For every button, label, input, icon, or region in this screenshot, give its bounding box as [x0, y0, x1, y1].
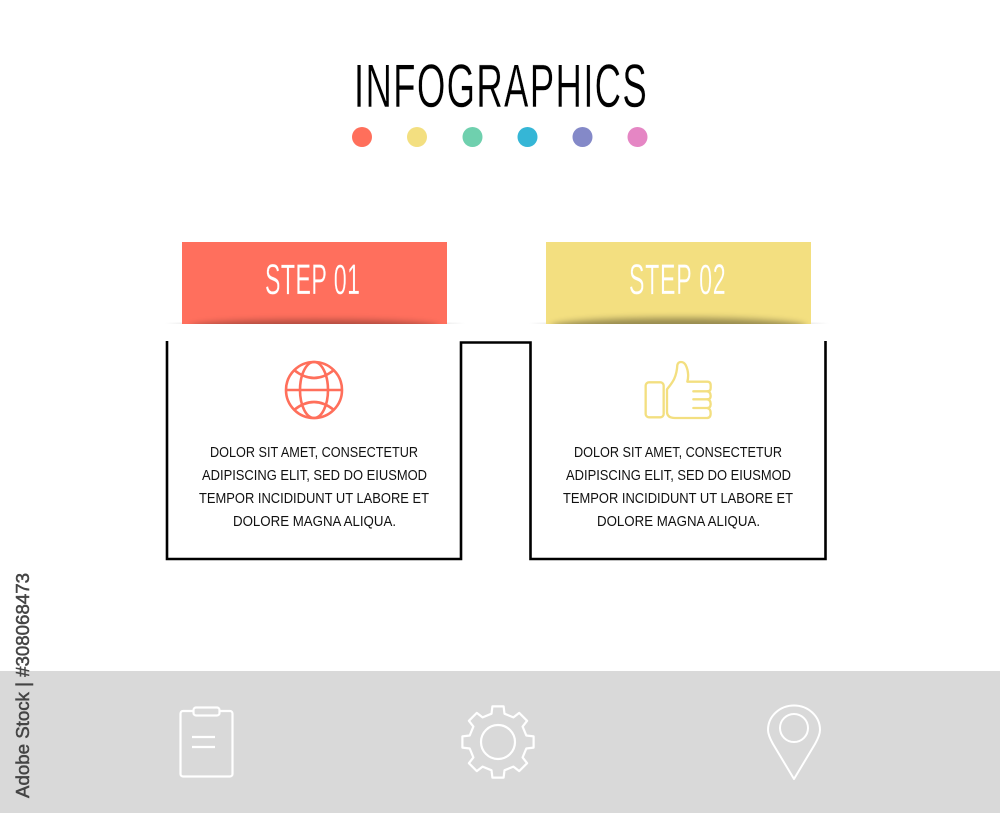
icon: map pin	[768, 706, 820, 779]
icon: clipboard	[180, 708, 232, 776]
text block: step 02 description: DOLORE MAGNA ALIQUA.	[597, 514, 760, 530]
text block: step 01 description: DOLORE MAGNA ALIQUA.	[233, 514, 396, 530]
title: INFOGRAPHICS	[354, 51, 647, 120]
panel: step 01 banner: STEP 01	[265, 257, 360, 304]
panel: step 02 banner: STEP 02	[629, 257, 726, 304]
text block: step 01 description	[199, 445, 429, 530]
text block: step 02 description: ADIPISCING ELIT, SED DO EIUSMOD	[566, 468, 791, 484]
text block: step 02 description: DOLOR SIT AMET, CONSECTETUR	[574, 445, 782, 461]
text block: step 02 description: TEMPOR INCIDIDUNT UT LABORE ET	[563, 491, 793, 507]
panel: step 02 banner	[538, 242, 820, 324]
text block: step 01 description: ADIPISCING ELIT, SED DO EIUSMOD	[202, 468, 427, 484]
text block: step 01 description: DOLOR SIT AMET, CONSECTETUR	[210, 445, 418, 461]
vertical stock id label: Adobe Stock | #308068473	[13, 573, 33, 798]
panel: step 01 banner	[174, 242, 456, 324]
text block: step 01 description: TEMPOR INCIDIDUNT UT LABORE ET	[199, 491, 429, 507]
connector outline around both steps	[167, 341, 826, 559]
text block: step 02 description	[563, 445, 793, 530]
icon: globe	[286, 362, 342, 418]
colour dots row	[352, 127, 648, 147]
icon: thumbs up	[646, 362, 711, 418]
icon: gear	[462, 706, 534, 778]
footer band	[0, 671, 1000, 813]
